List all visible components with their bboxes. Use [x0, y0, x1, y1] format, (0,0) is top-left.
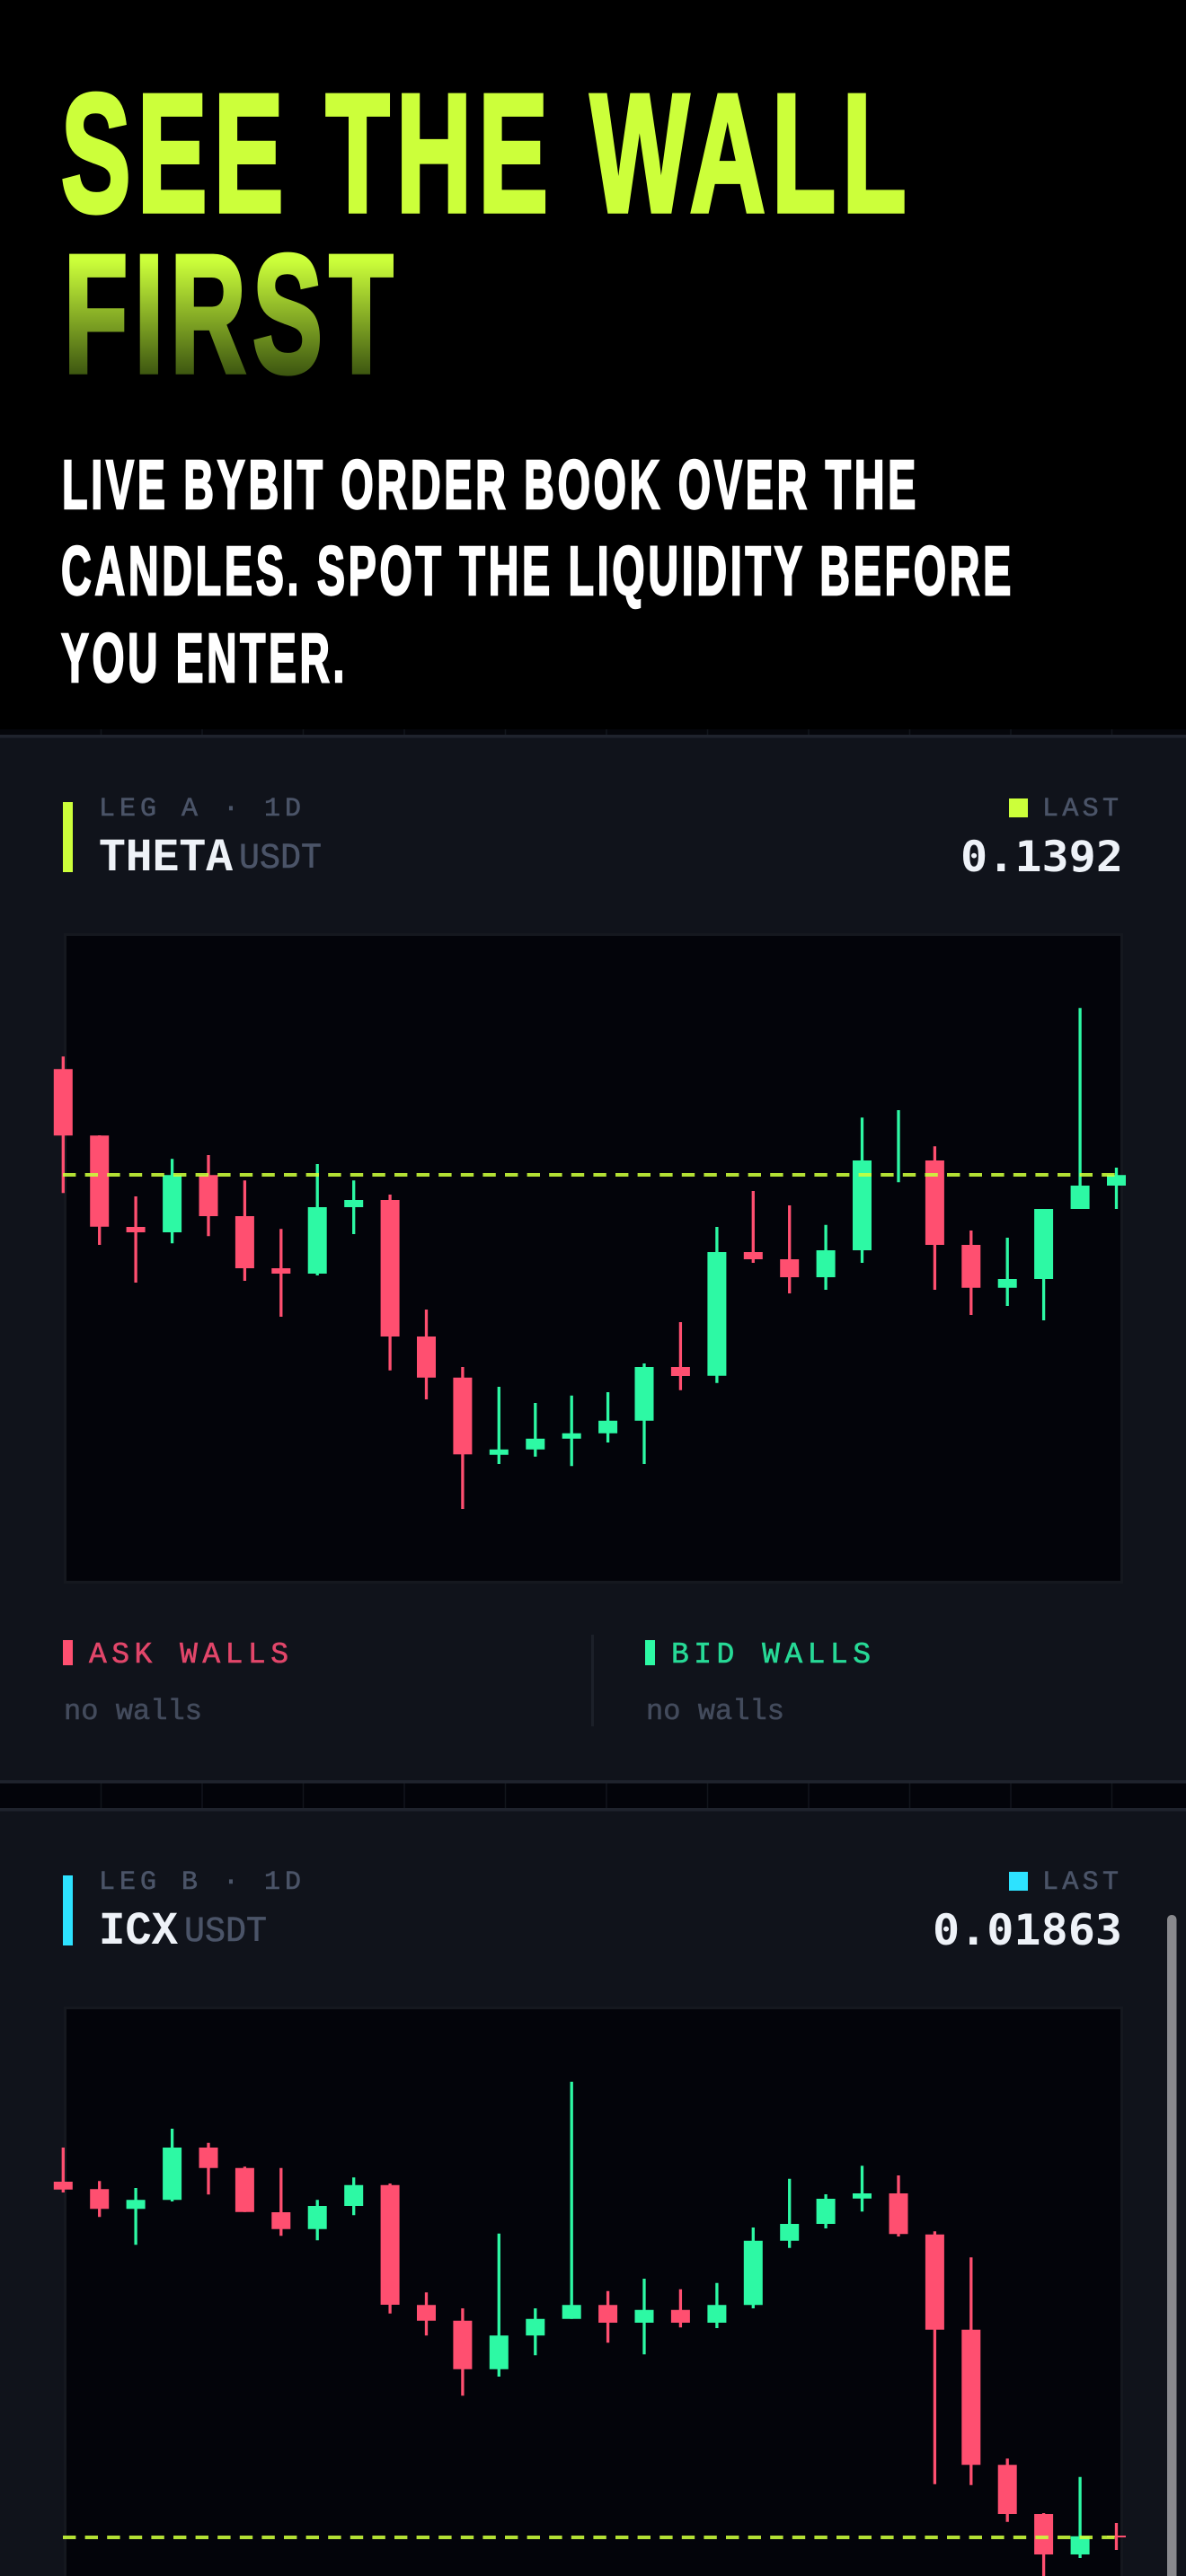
- bid walls list: BID WALLS: [671, 1638, 871, 1672]
- bullish candles: [173, 1008, 1117, 1466]
- leg A label: LEG A · 1D: [99, 794, 301, 825]
- panel: leg B ICXUSDT: [0, 1808, 1186, 2576]
- bearish candles: [63, 1056, 971, 1509]
- leg B label: LEG B · 1D: [99, 1867, 301, 1898]
- leg A last label: LAST: [1042, 794, 1119, 825]
- leg B last price: 0.01863: [933, 1906, 1122, 1955]
- ask walls list: ASK WALLS: [89, 1638, 288, 1672]
- ask walls list: no walls: [64, 1695, 202, 1728]
- leg A last marker: [1009, 798, 1028, 817]
- leg A chart: [63, 934, 1121, 1583]
- leg B last label: LAST: [1042, 1867, 1119, 1898]
- leg B symbol: ICX: [99, 1905, 179, 1958]
- bid walls list: [645, 1638, 871, 1728]
- bearish candles: [63, 2143, 1116, 2576]
- leg A last price: 0.1392: [960, 833, 1123, 882]
- leg A quote currency: USDT: [239, 839, 322, 879]
- subtitle: YOU ENTER.: [61, 620, 348, 697]
- leg B quote currency: USDT: [184, 1912, 267, 1953]
- leg B accent bar: [63, 1875, 73, 1945]
- bullish candles: [136, 2082, 1080, 2558]
- leg A accent bar: [63, 802, 73, 872]
- leg A symbol: THETA: [99, 832, 234, 885]
- bid walls list: no walls: [646, 1695, 784, 1728]
- scrollbar: [1167, 1915, 1177, 2576]
- last price line: [63, 2536, 1116, 2539]
- hero header: [61, 59, 1014, 697]
- title line 2 with fade: FIRST: [64, 220, 400, 408]
- ask walls list: [63, 1638, 288, 1728]
- panel: leg A THETAUSDT: [0, 735, 1186, 1784]
- last price line: [63, 1173, 1116, 1177]
- leg B chart: [63, 2008, 1121, 2576]
- subtitle: [61, 446, 1014, 697]
- leg B last marker: [1009, 1872, 1028, 1891]
